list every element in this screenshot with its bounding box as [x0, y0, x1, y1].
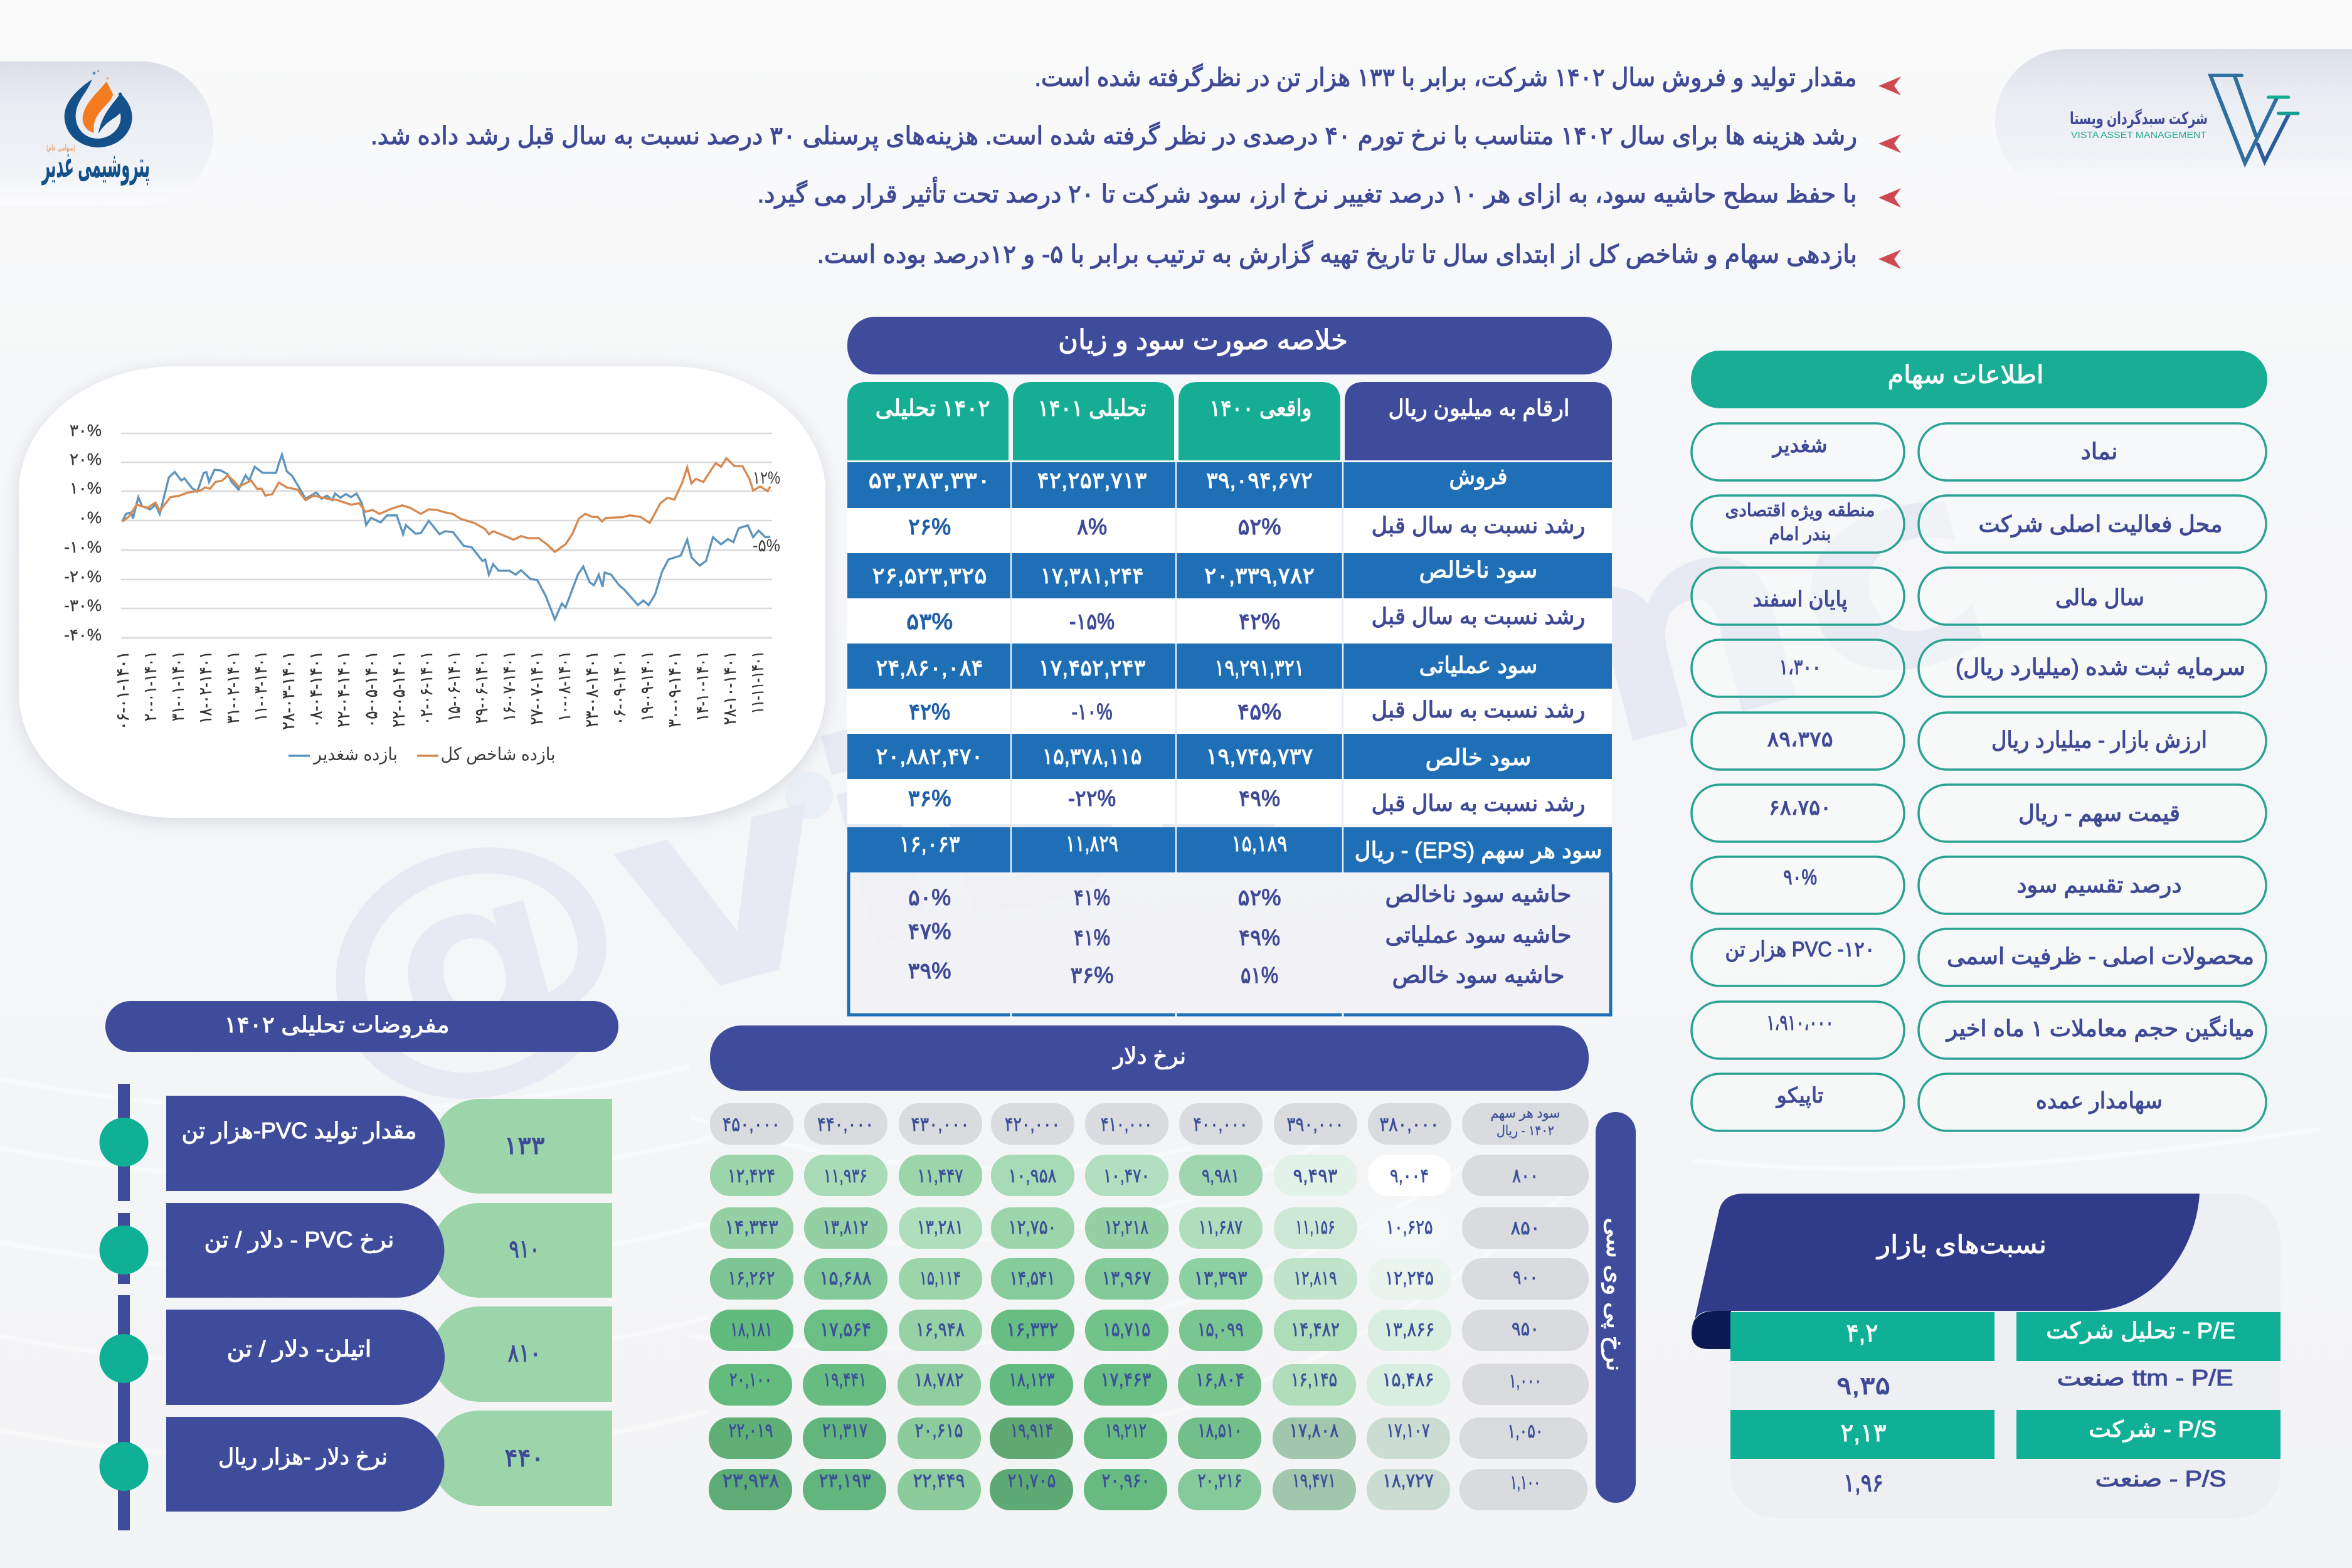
assumptions heading: مفروضات تحلیلی ۱۴۰۲	[225, 1012, 449, 1038]
row: PVC 1050: ۲۰,۶۱۵	[914, 1419, 963, 1441]
row: operating profit: ۱۹,۲۹۱,۳۲۱	[1214, 655, 1305, 681]
header row: dollar rates: ۴۴۰,۰۰۰	[817, 1113, 874, 1135]
x axis date labels: ۱۱-۰۳-۱۴۰۱	[251, 651, 270, 721]
arrow bullet 4	[1878, 250, 1901, 269]
row: location	[1725, 501, 2223, 544]
row: main shareholder	[1776, 1084, 2163, 1114]
icon: Vista V mark	[2210, 75, 2298, 163]
row: main shareholder: تاپیکو	[1776, 1084, 1824, 1108]
table heading	[847, 317, 1612, 374]
row: PVC 1050: ۲۱,۳۱۷	[822, 1419, 867, 1441]
table header row: واقعی ۱۴۰۰	[1209, 395, 1312, 421]
row: PVC 1050: ۱۸,۵۱۰	[1198, 1419, 1242, 1441]
x axis date labels: ۱۸-۰۲-۱۴۰۱	[196, 651, 215, 724]
header row: dollar rates: ۴۰۰,۰۰۰	[1193, 1113, 1248, 1135]
margins block: ۴۱%	[1074, 884, 1110, 910]
note 3: با حفظ سطح حاشیه سود، به ازای هر ۱۰ درصد تغییر نرخ ارز، سود شرکت تا ۲۰ درصد تحت تأثیر قرار می گیرد.	[758, 177, 1857, 209]
row: gross profit	[847, 553, 1612, 598]
y axis labels: -۱۰%	[64, 538, 102, 556]
row: PVC 950: ۱۷,۵۶۴	[820, 1318, 871, 1340]
row: PVC 1050	[709, 1417, 1587, 1459]
x axis date labels: ۲۰-۰۱-۱۴۰۱	[140, 651, 160, 721]
row: operating profit	[847, 644, 1612, 689]
row: earnings per share: سود هر سهم (EPS) - ریال	[1355, 837, 1602, 864]
row: PVC 900: ۱۵,۶۸۸	[819, 1267, 872, 1289]
row: sales growth: ۵۲%	[1238, 514, 1281, 539]
row: share price	[1769, 796, 2180, 827]
row: PVC 950: ۱۶,۳۳۲	[1006, 1318, 1059, 1340]
row: PVC 900: ۹۰۰	[1513, 1266, 1538, 1288]
row: sales: ۳۹,۰۹۴,۶۷۲	[1206, 467, 1313, 493]
x axis date labels: ۳۰-۰۹-۱۴۰۱	[665, 651, 684, 728]
ratio: industry P/S: ۱,۹۶	[1843, 1470, 1883, 1497]
y axis labels: -۴۰%	[64, 625, 102, 644]
y axis labels: -۲۰%	[64, 567, 102, 586]
chart legend: بازده شغدیر	[312, 744, 398, 765]
row: products: ۱۲۰- PVC هزار تن	[1725, 938, 1875, 962]
ribbon fold	[1692, 1311, 1731, 1349]
row: gross profit growth: رشد نسبت به سال قبل	[1371, 603, 1586, 630]
x axis date labels: ۳۱-۰۲-۱۴۰۱	[223, 651, 243, 724]
margins block: ۴۹%	[1239, 924, 1280, 950]
assumption: dollar rate: نرخ دلار -هزار ریال	[218, 1444, 388, 1470]
row: PVC 1000	[709, 1364, 1589, 1406]
row: symbol: شغدیر	[1772, 433, 1828, 458]
ribbon heading	[1692, 1194, 2200, 1333]
row: operating profit: ۱۷,۴۵۲,۲۴۳	[1039, 655, 1145, 681]
x axis date labels: ۰۲-۰۶-۱۴۰۱	[416, 651, 436, 725]
row: earnings per share	[847, 827, 1612, 872]
company type in logo: (سهامی عام)	[46, 143, 75, 153]
ratio: forecast P/E: ۴,۲	[1846, 1320, 1878, 1347]
x axis date labels: ۱۴-۱۰-۱۴۰۱	[692, 651, 712, 721]
ratio: industry P/E: ttm - P/E صنعت	[2057, 1365, 2233, 1391]
margins block: ۵۱%	[1241, 962, 1278, 988]
row: PVC 1100: ۲۰,۹۶۰	[1101, 1470, 1150, 1491]
ratio: industry P/S: P/S - صنعت	[2095, 1466, 2227, 1491]
panel: return line chart	[19, 366, 833, 819]
row: gross profit: سود ناخالص	[1419, 557, 1538, 583]
sensitivity heading: dollar rate: نرخ دلار	[1112, 1043, 1186, 1069]
logo panel: Ghadir petrochemical: پتروشیمی غدیر	[41, 145, 150, 186]
header row: dollar rates: ۴۳۰,۰۰۰	[911, 1113, 970, 1135]
row: PVC 1000: ۱۵,۴۸۶	[1382, 1369, 1434, 1391]
table heading: خلاصه صورت سود و زیان	[1058, 325, 1348, 356]
row: PVC 1100: ۱,۱۰۰	[1510, 1471, 1540, 1493]
x axis date labels: ۱۱-۱۱-۱۴۰۱	[748, 651, 767, 714]
row: net profit growth: ۴۹%	[1239, 785, 1280, 811]
margins block: ۴۱%	[1074, 924, 1110, 950]
row: operating profit growth: رشد نسبت به سال قبل	[1371, 697, 1586, 723]
row: earnings per share: ۱۶,۰۶۳	[899, 831, 960, 857]
row: PVC 1100: ۲۱,۷۰۵	[1007, 1470, 1056, 1491]
row: PVC 900: ۱۵,۱۱۴	[919, 1267, 961, 1289]
row: PVC 800: ۱۱,۴۴۷	[917, 1165, 963, 1187]
table header row: تحلیلی ۱۴۰۱	[1037, 395, 1147, 421]
row: PVC 850: ۱۱,۶۸۷	[1199, 1216, 1242, 1238]
x axis date labels: ۰۸-۰۴-۱۴۰۱	[306, 651, 326, 728]
row: sales: ۵۳,۳۸۳,۳۳۰	[868, 467, 991, 493]
row: fiscal year: پایان اسفند	[1752, 588, 1848, 612]
row: PVC 850: ۱۲,۲۱۸	[1104, 1216, 1148, 1238]
row: PVC 850: ۸۵۰	[1510, 1217, 1540, 1239]
end label share: -۵%	[753, 536, 780, 555]
row: gross profit: ۲۰,۳۳۹,۷۸۲	[1204, 563, 1315, 588]
row: PVC 1000: ۱۸,۱۲۳	[1009, 1369, 1055, 1391]
timeline	[99, 1084, 148, 1530]
row: location: محل فعالیت اصلی شرکت	[1978, 511, 2223, 538]
y axis labels: ۳۰%	[70, 421, 102, 440]
ratio: company P/S: P/S - شرکت	[2089, 1416, 2217, 1443]
row: market value: ۸۹،۳۷۵	[1767, 728, 1833, 751]
row: PVC 1050: ۱,۰۵۰	[1508, 1420, 1543, 1442]
row: PVC 950: ۹۵۰	[1512, 1318, 1539, 1340]
row: PVC 950: ۱۳,۸۶۶	[1384, 1318, 1435, 1340]
x axis date labels: ۱۵-۰۶-۱۴۰۱	[444, 651, 464, 721]
margins block: حاشیه سود ناخالص	[1385, 881, 1572, 908]
row: operating profit growth	[847, 689, 1612, 734]
row: sales: فروش	[1449, 464, 1508, 490]
panel: stock information	[1691, 351, 2267, 1131]
row: products: محصولات اصلی - ظرفیت اسمی	[1947, 943, 2254, 970]
row: PVC 900: ۱۳,۹۶۷	[1101, 1267, 1152, 1289]
row: PVC 1000: ۱۹,۴۴۱	[823, 1369, 867, 1391]
row: net profit growth: -۲۲%	[1068, 785, 1116, 811]
row: gross profit: ۱۷,۳۸۱,۲۴۴	[1040, 563, 1144, 588]
x axis date labels: ۰۶-۰۹-۱۴۰۱	[610, 651, 629, 725]
x axis date labels: ۲۲-۰۵-۱۴۰۱	[389, 651, 408, 728]
chart legend	[289, 744, 556, 765]
assumption: dollar rate	[166, 1411, 612, 1512]
ratio: forecast P/E	[1730, 1312, 2280, 1361]
x axis date labels: ۰۶-۰۱-۱۴۰۱	[113, 651, 132, 730]
x axis date labels: ۲۲-۰۴-۱۴۰۱	[334, 651, 353, 728]
logo panel: Ghadir petrochemical	[0, 61, 213, 206]
note 4: بازدهی سهام و شاخص کل از ابتدای سال تا تاریخ تهیه گزارش به ترتیب برابر با ۵- و ۱۲درصد بوده است.	[817, 240, 1857, 269]
row: PVC 950: ۱۸,۱۸۱	[730, 1318, 773, 1340]
end label index: ۱۲%	[753, 468, 780, 487]
row: PVC 850: ۱۳,۲۸۱	[917, 1216, 963, 1238]
side bar: PVC price	[1596, 1112, 1636, 1503]
row: gross profit growth: ۵۳%	[906, 608, 953, 634]
y axis labels: -۳۰%	[64, 596, 102, 615]
row: net profit growth	[847, 779, 1612, 824]
row: PVC 1000: ۱۶,۸۰۴	[1195, 1369, 1244, 1391]
row: PVC 1050: ۱۹,۹۱۴	[1010, 1419, 1053, 1441]
row: trade volume: میانگین حجم معاملات ۱ ماه اخیر	[1945, 1015, 2254, 1042]
row: PVC 800: ۹,۴۹۳	[1293, 1165, 1337, 1187]
row: PVC 800	[710, 1155, 1589, 1196]
row: PVC 800: ۱۲,۴۲۴	[728, 1165, 775, 1187]
row: fiscal year	[1752, 585, 2144, 612]
x axis date labels: ۲۹-۰۶-۱۴۰۱	[472, 651, 491, 724]
row: PVC 1100: ۲۰,۲۱۶	[1198, 1470, 1242, 1491]
row: trade volume: ۱،۹۱۰،۰۰۰	[1766, 1011, 1834, 1035]
margins block: حاشیه سود عملیاتی	[1385, 922, 1572, 948]
y axis labels: ۰%	[78, 508, 102, 527]
arrow bullet 3	[1878, 188, 1901, 208]
row: operating profit growth: -۱۰%	[1071, 699, 1113, 724]
row: fiscal year: سال مالی	[2055, 585, 2144, 610]
row: PVC 1000: ۱۷,۴۶۳	[1100, 1369, 1152, 1391]
row: gross profit: ۲۶,۵۲۳,۳۲۵	[872, 563, 987, 588]
assumption: production: مقدار تولید PVC-هزار تن	[182, 1118, 416, 1144]
icon: flame logo	[65, 70, 132, 147]
row: earnings per share: ۱۵,۱۸۹	[1232, 830, 1287, 856]
Vista name Persian: شرکت سبدگردان ویستا	[2070, 109, 2208, 129]
row: PVC 850: ۱۳,۸۱۲	[823, 1216, 868, 1238]
header row: dollar rates: سود هر سهم	[1490, 1105, 1560, 1121]
x axis date labels: ۱۹-۰۹-۱۴۰۱	[637, 651, 657, 721]
header row: dollar rates	[710, 1103, 1589, 1145]
row: PVC 1000: ۱۶,۱۴۵	[1291, 1369, 1337, 1391]
y axis labels	[64, 421, 102, 644]
row: registered capital: ۱،۳۰۰	[1779, 655, 1821, 679]
row: net profit growth: رشد نسبت به سال قبل	[1371, 790, 1586, 817]
assumption: production	[166, 1096, 612, 1194]
row: dividend	[1783, 866, 2181, 898]
x axis date labels: ۲۸-۰۳-۱۴۰۱	[278, 651, 298, 730]
row: operating profit: سود عملیاتی	[1419, 652, 1538, 679]
row: net profit: ۱۹,۷۴۵,۷۳۷	[1205, 743, 1313, 769]
row: PVC 900: ۱۲,۲۴۵	[1385, 1267, 1434, 1289]
stock heading	[1691, 351, 2267, 408]
margins block: حاشیه سود خالص	[1392, 962, 1564, 988]
row: PVC 900: ۱۶,۲۶۲	[728, 1267, 775, 1289]
panel: income statement summary	[847, 317, 1612, 1017]
row: PVC 800: ۱۱,۹۳۶	[824, 1165, 867, 1187]
x axis date labels: ۱۰-۰۸-۱۴۰۱	[554, 651, 574, 721]
column separators	[1011, 462, 1343, 872]
table header row: ۱۴۰۲ تحلیلی	[876, 395, 990, 421]
row: PVC 850: ۱۱,۱۵۶	[1296, 1216, 1335, 1238]
row: PVC 800: ۱۰,۹۵۸	[1009, 1165, 1056, 1187]
row: PVC 800: ۹,۰۰۴	[1390, 1165, 1429, 1187]
row: market value	[1767, 727, 2207, 753]
watermark: @vistamc	[271, 388, 2022, 1152]
ratio: company P/S: ۲,۱۳	[1840, 1419, 1887, 1447]
key notes list	[371, 63, 1901, 269]
row: main shareholder: سهامدار عمده	[2036, 1088, 2163, 1114]
row: gross profit growth: -۱۵%	[1069, 608, 1115, 634]
row: PVC 850: ۱۲,۷۵۰	[1009, 1216, 1056, 1238]
assumption: ethylene price: اتیلن- دلار / تن	[227, 1336, 371, 1362]
x axis date labels: ۲۷-۰۷-۱۴۰۱	[527, 651, 546, 725]
margins block: ۵۰%	[908, 884, 951, 910]
row: PVC 800: ۱۰,۴۷۰	[1103, 1165, 1150, 1187]
row: symbol	[1772, 433, 2117, 464]
assumptions heading	[105, 1001, 618, 1052]
row: PVC 900: ۱۴,۵۴۱	[1010, 1267, 1055, 1289]
panel: market ratios	[1692, 1194, 2280, 1518]
chart legend: بازده شاخص کل	[440, 744, 556, 765]
row: trade volume	[1766, 1011, 2254, 1042]
row: sales: ۴۲,۲۵۳,۷۱۳	[1037, 467, 1147, 493]
row: share price: ۶۸،۷۵۰	[1769, 796, 1831, 820]
row: net profit: سود خالص	[1425, 744, 1532, 771]
row: sales	[847, 462, 1612, 508]
assumption: PVC price	[166, 1203, 612, 1298]
row: operating profit growth: ۴۵%	[1237, 699, 1281, 724]
header row: dollar rates: ۴۵۰,۰۰۰	[723, 1113, 780, 1135]
x axis date labels: ۲۳-۰۸-۱۴۰۱	[582, 651, 601, 728]
row: PVC 1000: ۱,۰۰۰	[1509, 1370, 1542, 1392]
row: PVC 1050: ۱۷,۸۰۸	[1290, 1419, 1338, 1441]
x axis date labels: ۱۶-۰۷-۱۴۰۱	[499, 651, 519, 721]
header row: dollar rates: ۱۴۰۲ - ریال	[1496, 1123, 1554, 1138]
row: products	[1725, 938, 2254, 970]
row: location: بندر امام	[1769, 524, 1831, 544]
row: net profit: ۲۰,۸۸۲,۴۷۰	[876, 743, 983, 769]
x axis date labels: ۳۱-۰۱-۱۴۰۱	[168, 651, 188, 721]
x axis date labels: ۲۸-۱۰-۱۴۰۱	[720, 651, 739, 725]
row: earnings per share: ۱۱,۸۲۹	[1066, 830, 1118, 856]
row: sales growth: ۸%	[1077, 514, 1107, 539]
ratio: industry P/E: ۹,۳۵	[1836, 1372, 1890, 1400]
margins block: ۳۶%	[1070, 962, 1114, 988]
row: PVC 850: ۱۰,۶۲۵	[1386, 1216, 1433, 1238]
header row: dollar rates: ۴۲۰,۰۰۰	[1005, 1113, 1060, 1135]
line: total index return	[122, 458, 770, 552]
y axis labels: ۲۰%	[70, 450, 102, 469]
ratio: industry P/E	[1836, 1365, 2233, 1400]
Vista name English: VISTA ASSET MANAGEMENT	[2071, 130, 2206, 140]
logo panel: Vista asset management	[1995, 49, 2352, 194]
ratio: company P/S	[1730, 1410, 2280, 1459]
row: registered capital: سرمایه ثبت شده (میلیارد ریال)	[1956, 654, 2245, 681]
row: share price: قیمت سهم - ریال	[2018, 800, 2180, 827]
assumption: PVC price: ۹۱۰	[509, 1236, 539, 1263]
row: PVC 850: ۱۴,۳۴۳	[725, 1216, 778, 1238]
arrow bullet 2	[1878, 134, 1901, 153]
x axis date labels: ۰۵-۰۵-۱۴۰۱	[361, 651, 381, 728]
row: net profit	[847, 734, 1612, 779]
assumption: PVC price: نرخ PVC - دلار / تن	[204, 1227, 394, 1253]
row: PVC 1100: ۱۸,۷۲۷	[1382, 1470, 1434, 1491]
arrow bullet 1	[1878, 77, 1901, 95]
header row: dollar rates: ۳۹۰,۰۰۰	[1287, 1113, 1343, 1135]
row: PVC 1100	[709, 1469, 1587, 1510]
row: PVC 850	[710, 1207, 1589, 1249]
row: PVC 800: ۸۰۰	[1512, 1165, 1539, 1187]
assumption: ethylene price	[166, 1306, 612, 1405]
row: gross profit growth: ۴۲%	[1239, 608, 1280, 634]
x axis date labels	[113, 651, 767, 730]
row: sales growth: رشد نسبت به سال قبل	[1371, 512, 1586, 539]
header row: dollar rates: ۳۸۰,۰۰۰	[1380, 1113, 1439, 1135]
note 2: رشد هزینه ها برای سال ۱۴۰۲ متناسب با نرخ تورم ۴۰ درصدی در نظر گرفته شده است. هزینه‌های پرسنلی ۳۰ درصد نسبت به سال قبل رشد داده شد.	[371, 122, 1857, 151]
margins block: ۵۲%	[1238, 884, 1281, 910]
table header row	[847, 382, 1612, 460]
sensitivity heading: dollar rate	[710, 1025, 1589, 1091]
row: market value: ارزش بازار - میلیارد ریال	[1991, 727, 2207, 753]
ratio: forecast P/E: P/E - تحلیل شرکت	[2046, 1318, 2235, 1344]
assumption: dollar rate: ۴۴۰	[504, 1444, 544, 1472]
row: dividend: درصد تقسیم سود	[2017, 872, 2181, 898]
row: PVC 950: ۱۶,۹۴۸	[916, 1318, 965, 1340]
margins block	[847, 872, 1612, 1017]
row: operating profit growth: ۴۲%	[909, 699, 950, 724]
header row: dollar rates: ۴۱۰,۰۰۰	[1101, 1113, 1152, 1135]
row: operating profit: ۲۴,۸۶۰,۰۸۴	[876, 655, 983, 681]
row: symbol: نماد	[2081, 438, 2117, 464]
row: dividend: ۹۰%	[1783, 866, 1817, 889]
row: PVC 900: ۱۲,۸۱۹	[1293, 1267, 1337, 1289]
side bar: PVC price: نرخ پی وی سی	[1601, 1218, 1628, 1371]
margins block: ۴۷%	[908, 918, 951, 944]
row: PVC 1000: ۱۸,۷۸۲	[914, 1369, 963, 1391]
row: net profit growth: ۳۶%	[908, 785, 951, 811]
margins block: ۳۹%	[908, 958, 951, 983]
row: PVC 950: ۱۴,۴۸۲	[1291, 1318, 1340, 1340]
note 1: مقدار تولید و فروش سال ۱۴۰۲ شرکت، برابر با ۱۳۳ هزار تن در نظرگرفته شده است.	[1035, 63, 1857, 92]
panel: sensitivity table	[709, 1025, 1636, 1510]
row: PVC 1100: ۲۳,۱۹۳	[819, 1470, 871, 1491]
row: location: منطقه ویژه اقتصادی	[1725, 501, 1875, 521]
row: sales growth: ۲۶%	[908, 514, 951, 539]
row: PVC 800: ۹,۹۸۱	[1202, 1165, 1239, 1187]
row: PVC 1100: ۲۲,۴۴۹	[913, 1470, 965, 1491]
row: PVC 1100: ۲۳,۹۳۸	[723, 1470, 779, 1491]
stock heading: اطلاعات سهام	[1888, 361, 2043, 389]
row: PVC 900: ۱۳,۳۹۳	[1194, 1267, 1247, 1289]
table header row: ارقام به میلیون ریال	[1389, 395, 1569, 421]
row: PVC 1100: ۱۹,۴۷۱	[1292, 1470, 1336, 1491]
y axis labels: ۱۰%	[70, 479, 102, 497]
row: PVC 900	[710, 1258, 1589, 1300]
row: net profit: ۱۵,۳۷۸,۱۱۵	[1042, 743, 1142, 769]
assumption: production: ۱۳۳	[504, 1132, 544, 1160]
row: PVC 950	[710, 1310, 1589, 1351]
ratio: industry P/S	[1843, 1466, 2227, 1497]
panel: analytical assumptions	[99, 1001, 618, 1530]
row: sales growth	[847, 508, 1612, 553]
row: PVC 950: ۱۵,۷۱۵	[1103, 1318, 1150, 1340]
ribbon heading: نسبت‌های بازار	[1876, 1231, 2047, 1259]
line: shareholder return	[122, 455, 770, 620]
assumption: ethylene price: ۸۱۰	[508, 1340, 541, 1367]
row: PVC 950: ۱۵,۰۹۹	[1197, 1318, 1244, 1340]
row: PVC 1050: ۲۲,۰۱۹	[729, 1419, 773, 1441]
row: gross profit growth	[847, 598, 1612, 644]
row: PVC 1050: ۱۷,۱۰۷	[1386, 1419, 1430, 1441]
row: PVC 1000: ۲۰,۱۰۰	[729, 1369, 772, 1391]
row: PVC 1050: ۱۹,۲۱۲	[1105, 1419, 1147, 1441]
row: registered capital	[1779, 654, 2245, 681]
